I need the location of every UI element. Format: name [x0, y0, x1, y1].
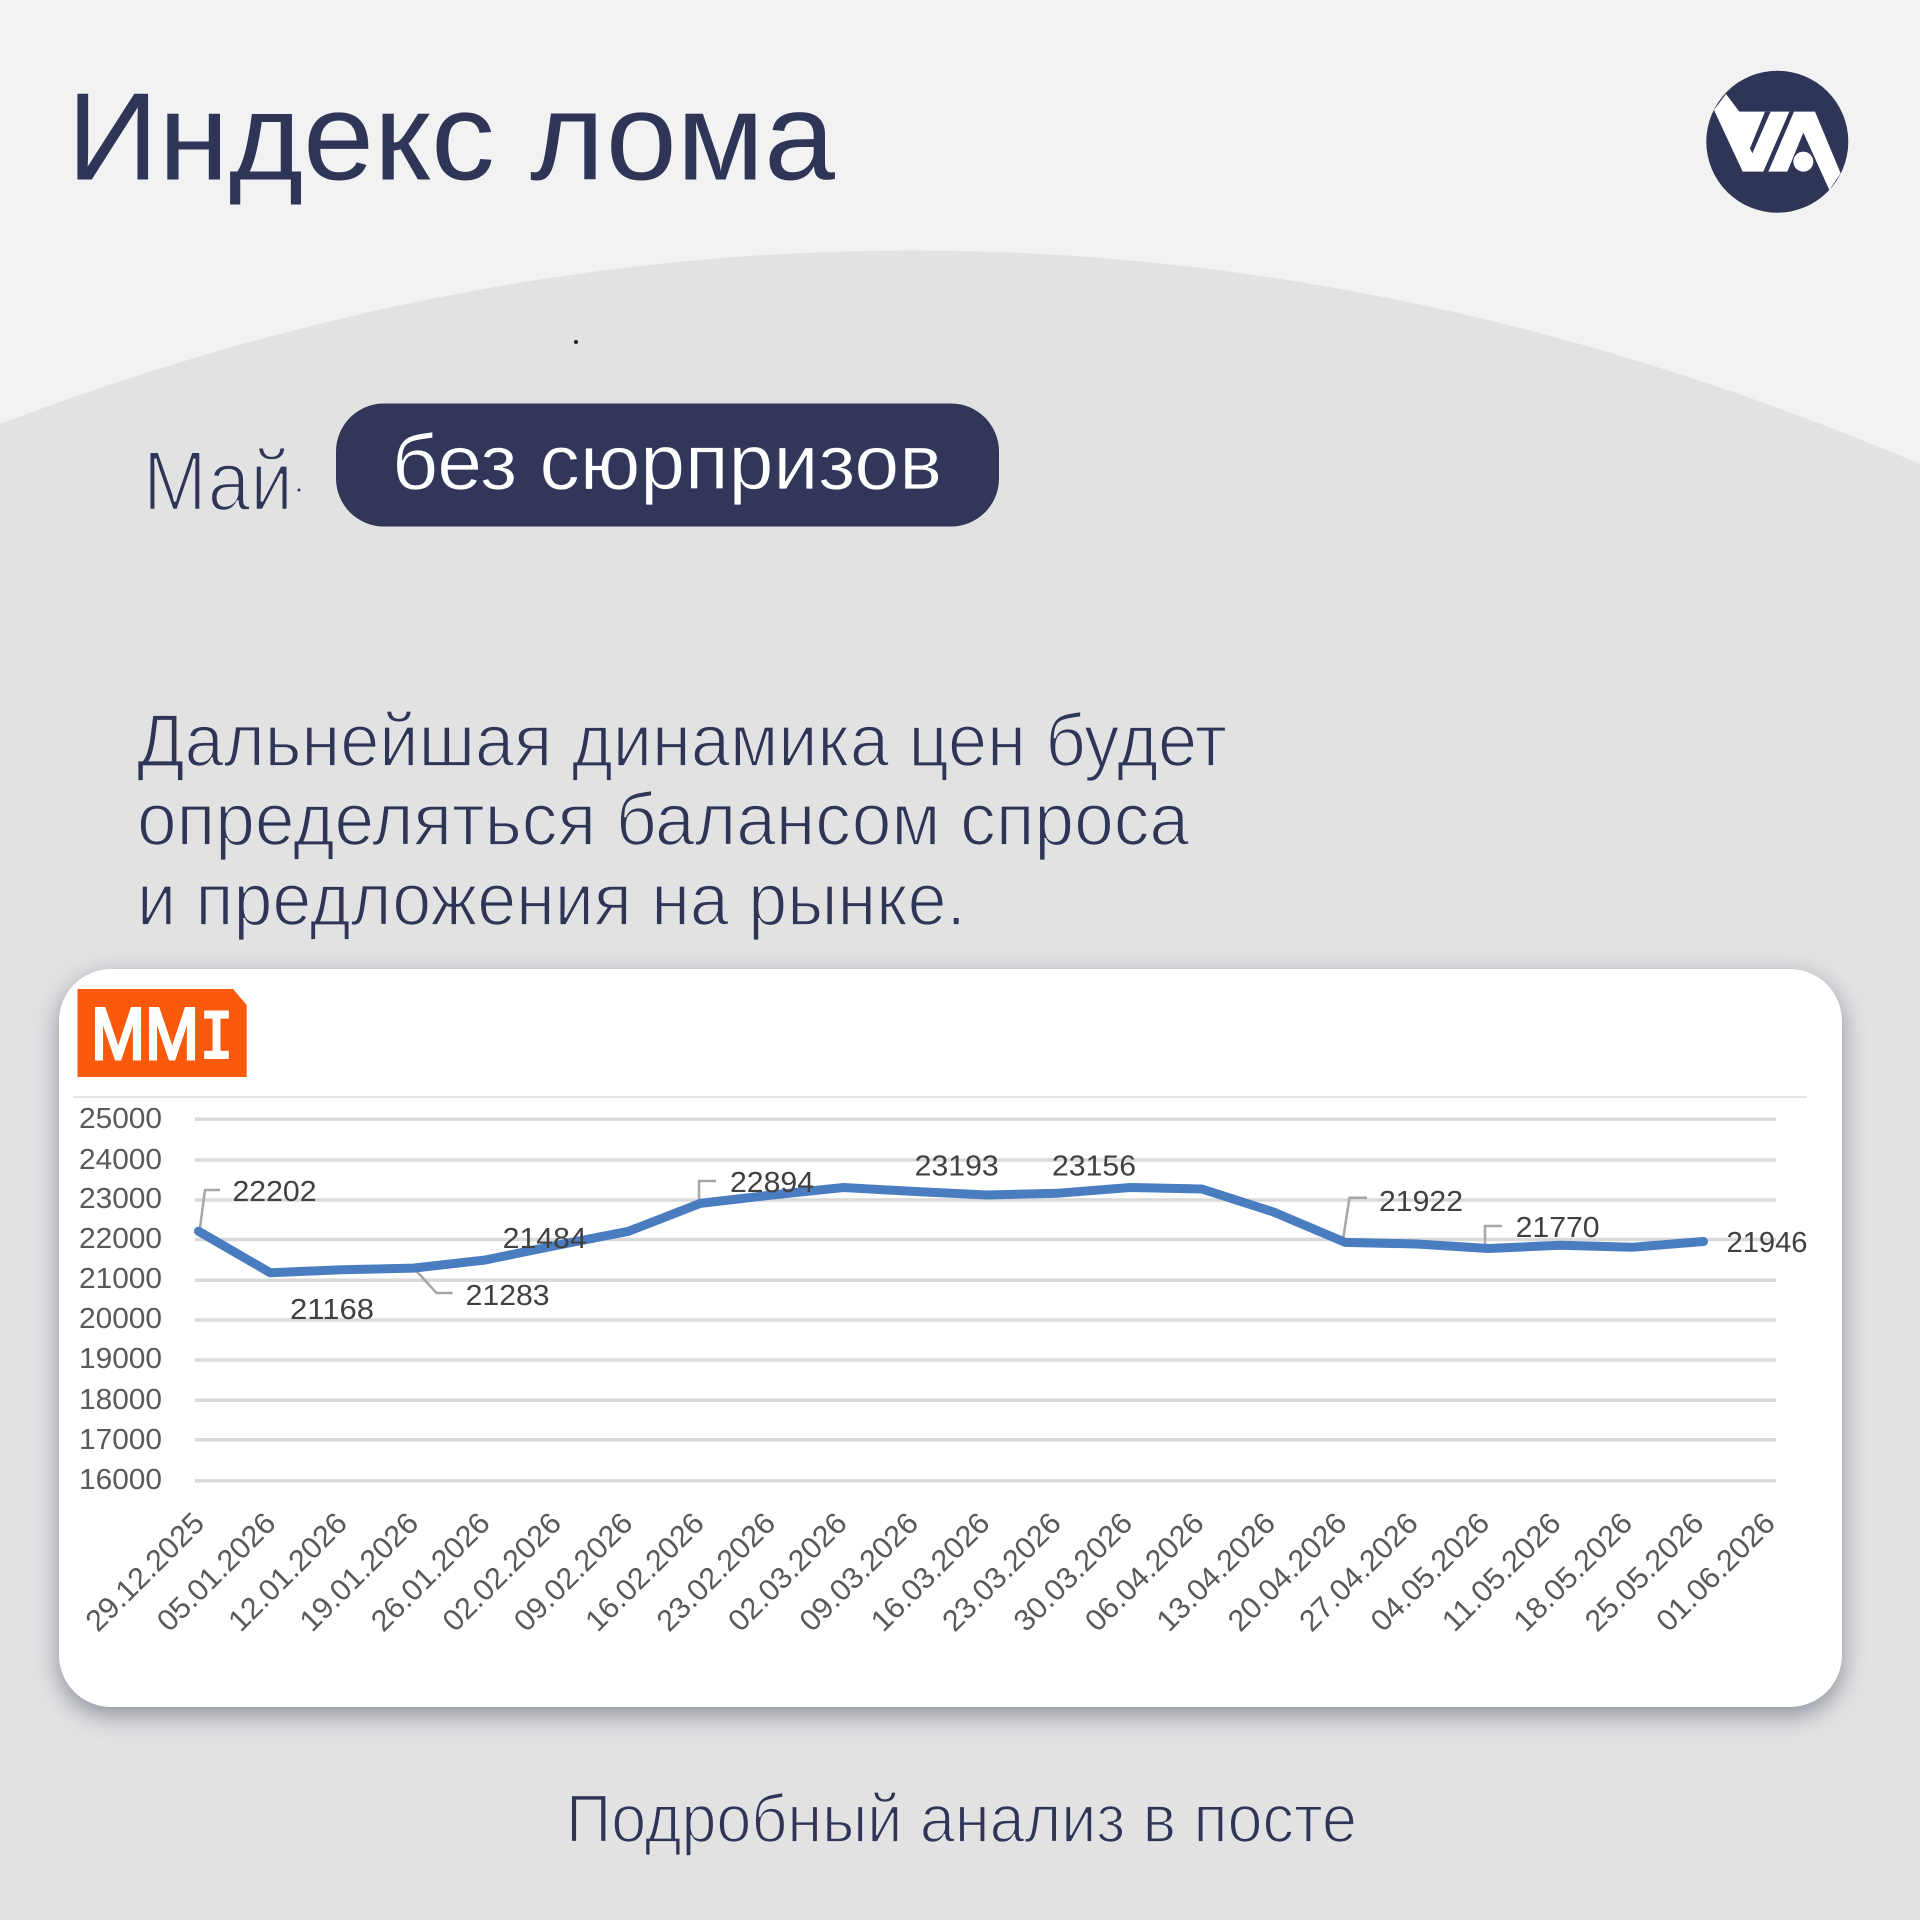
x axis date labels: 16.03.2026 [865, 1507, 996, 1638]
data value labels: 21283 [466, 1280, 550, 1312]
x axis date labels: 27.04.2026 [1293, 1507, 1425, 1638]
data value labels: 21770 [1516, 1212, 1600, 1244]
y axis labels: 22000 [79, 1223, 162, 1255]
x axis date labels [79, 1507, 1782, 1638]
icon: MMI logo: MM [91, 994, 199, 1075]
x axis date labels: 02.02.2026 [436, 1507, 568, 1638]
x axis date labels: 26.01.2026 [365, 1507, 497, 1638]
panel: chart card [59, 969, 1842, 1707]
x axis date labels: 05.01.2026 [151, 1507, 282, 1638]
card separator [73, 1096, 1807, 1098]
data value labels: 22202 [232, 1176, 316, 1208]
y axis labels: 25000 [79, 1103, 162, 1135]
x axis date labels: 23.03.2026 [936, 1507, 1068, 1638]
x axis date labels: 09.03.2026 [793, 1507, 925, 1638]
x axis date labels: 02.03.2026 [722, 1507, 854, 1638]
x axis date labels: 23.02.2026 [651, 1507, 782, 1638]
x axis date labels: 29.12.2025 [79, 1507, 211, 1638]
chart gridlines [195, 1119, 1776, 1481]
x axis date labels: 18.05.2026 [1507, 1507, 1639, 1638]
x axis date labels: 11.05.2026 [1436, 1507, 1568, 1638]
body text: Дальнейшая динамика цен будет [137, 699, 1227, 782]
data value labels: 21922 [1379, 1186, 1463, 1218]
dot after month [298, 488, 300, 492]
y axis labels: 17000 [79, 1424, 162, 1456]
y axis labels: 18000 [79, 1384, 162, 1416]
icon: MMI logo: I [200, 998, 233, 1081]
icon: MMI logo [78, 989, 247, 1081]
y axis labels: 21000 [79, 1263, 162, 1295]
y axis labels: 23000 [79, 1183, 162, 1215]
data value labels: 22894 [730, 1167, 814, 1199]
x axis date labels: 16.02.2026 [579, 1507, 711, 1638]
body text [137, 699, 1227, 941]
y axis labels [79, 1103, 162, 1496]
line chart [79, 1103, 1808, 1638]
data value labels: 21484 [503, 1223, 587, 1255]
x axis date labels: 20.04.2026 [1222, 1507, 1353, 1638]
dot mark [574, 340, 578, 344]
x axis date labels: 30.03.2026 [1008, 1507, 1139, 1638]
body text: определяться балансом спроса [137, 778, 1190, 861]
data value labels: 21946 [1726, 1227, 1808, 1259]
subtitle: month: Май [143, 434, 293, 528]
y axis labels: 20000 [79, 1303, 162, 1335]
x axis date labels: 13.04.2026 [1150, 1507, 1282, 1638]
y axis labels: 19000 [79, 1343, 162, 1375]
data label leader lines [200, 1181, 1502, 1293]
x axis date labels: 04.05.2026 [1365, 1507, 1496, 1638]
data value labels: 23156 [1052, 1150, 1136, 1182]
data value labels: 21168 [290, 1294, 374, 1326]
x axis date labels: 19.01.2026 [294, 1507, 425, 1638]
x axis date labels: 25.05.2026 [1579, 1507, 1710, 1638]
footer text: Подробный анализ в посте [566, 1781, 1357, 1857]
title: Индекс лома [67, 68, 835, 206]
body text: и предложения на рынке. [137, 858, 966, 941]
data value labels: 23193 [915, 1150, 999, 1182]
icon: VA logo [1706, 71, 1848, 213]
pill: без сюрпризов: без сюрпризов [392, 418, 942, 506]
x axis date labels: 06.04.2026 [1079, 1507, 1211, 1638]
x axis date labels: 01.06.2026 [1650, 1507, 1782, 1638]
x axis date labels: 09.02.2026 [508, 1507, 639, 1638]
data value labels [232, 1150, 1808, 1326]
x axis date labels: 12.01.2026 [222, 1507, 354, 1638]
pill: без сюрпризов [336, 404, 999, 526]
y axis labels: 24000 [79, 1144, 162, 1176]
data line [198, 1188, 1704, 1273]
y axis labels: 16000 [79, 1464, 162, 1496]
